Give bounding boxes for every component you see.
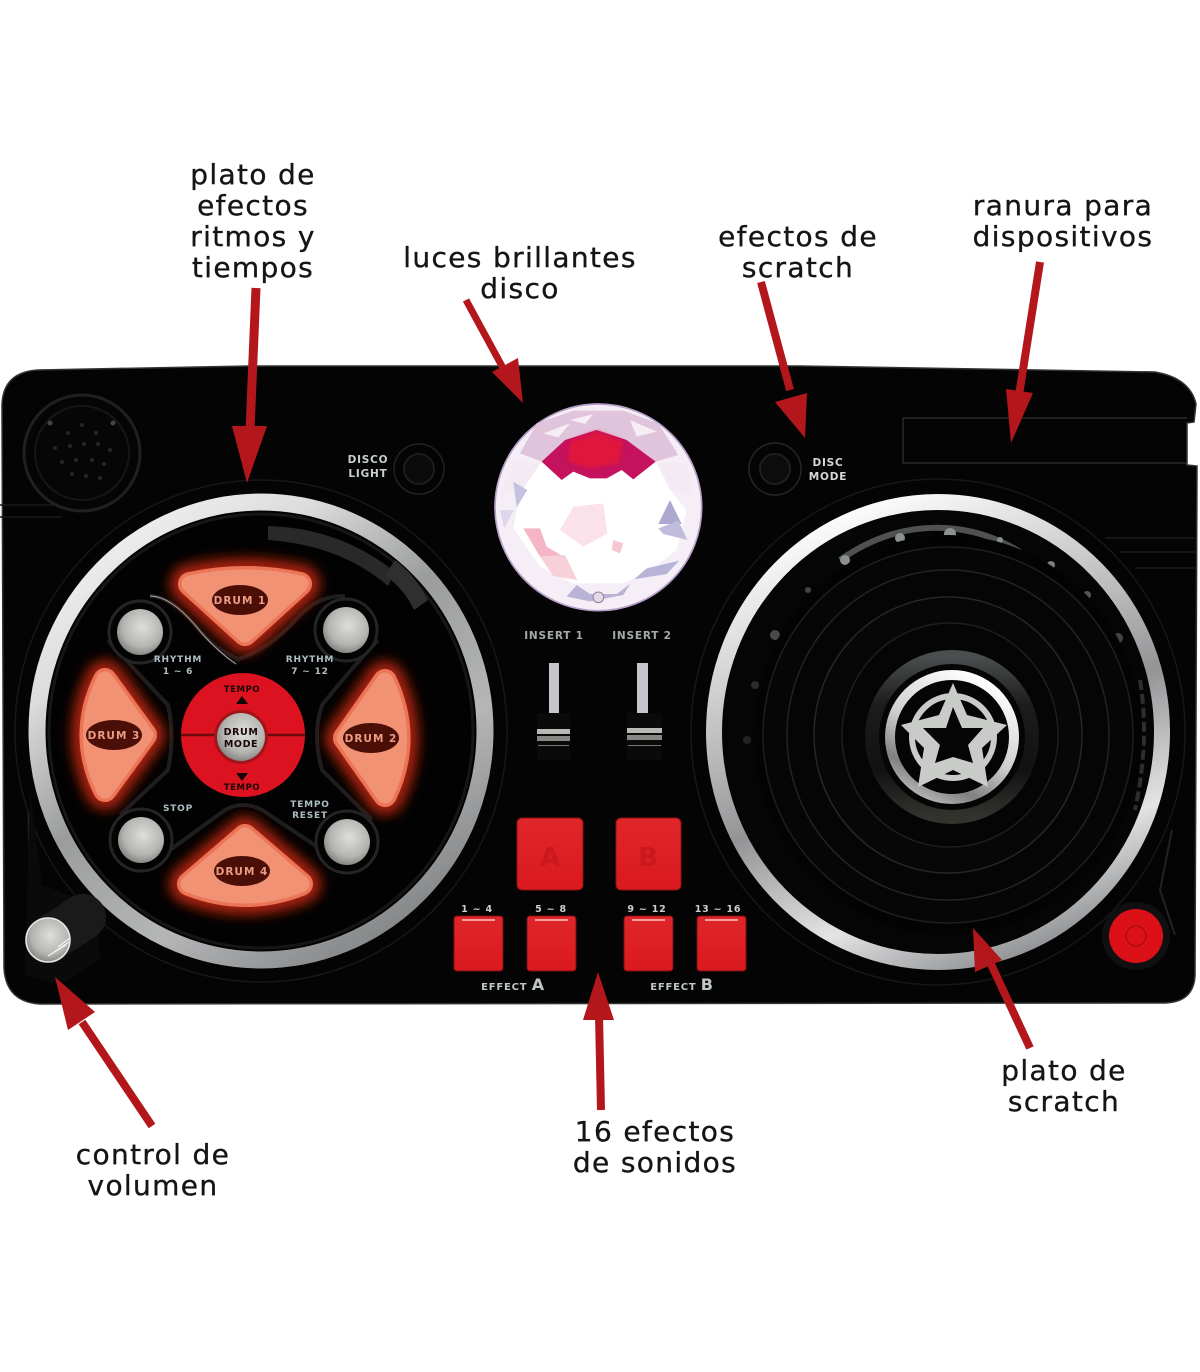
labels: rhythm and tempo: RESET [292,811,328,821]
effect buttons and labels: 9 ~ 12 [627,904,667,915]
caption: luces brillantes disco: luces brillantes [403,241,637,274]
arrow: to sound effects [583,972,614,1110]
caption: plato de scratch: plato de [1001,1054,1127,1087]
slider: insert 1 [537,663,570,760]
pad: drum 3 [86,680,145,790]
button: B: B [638,843,658,873]
silver buttons [109,599,378,873]
right platter [691,479,1185,985]
labels: rhythm and tempo: 7 ~ 12 [291,667,329,677]
hub [872,657,1032,817]
ball facets [500,411,693,603]
effect buttons and labels: EFFECT A [481,975,545,994]
speaker grille [24,395,140,511]
pad: drum 2 [343,681,399,795]
drum glow [92,578,398,895]
tempo control [181,673,305,797]
arrow: to device slot [1006,262,1040,443]
button: disc mode [749,443,801,495]
caption: plato de efectos ritmos y tiempos: efectos [197,189,309,222]
label: disc mode: MODE [809,471,847,483]
effect buttons and labels: 5 ~ 8 [535,904,567,915]
label: insert 1: INSERT 1 [524,630,584,642]
arrow: to disco ball [466,300,523,403]
star emblem [890,675,1014,799]
tempo control: DRUM [224,727,258,738]
caption: control de volumen: volumen [88,1169,218,1202]
tempo control: TEMPO [224,685,260,695]
device body [0,366,1197,1004]
pad: drum 2: DRUM 2 [345,733,397,745]
caption: control de volumen: control de [76,1138,230,1171]
effect buttons and labels [454,904,746,994]
button: B [616,818,681,890]
caption: 16 efectos de sonidos: de sonidos [573,1146,737,1179]
pad: drum 1 [190,578,300,634]
slider: insert 2 [627,663,662,760]
concentric grooves [754,535,1142,935]
caption: efectos de scratch: scratch [742,251,854,284]
label: insert 2: INSERT 2 [612,630,672,642]
label: disco light: DISCO [348,454,388,466]
red button [1102,902,1170,970]
caption: luces brillantes disco: disco [480,272,560,305]
effect buttons and labels: 13 ~ 16 [695,904,741,915]
labels: rhythm and tempo [154,655,334,821]
labels: rhythm and tempo: RHYTHM [154,655,202,665]
volume knob [25,790,100,985]
arrow: to drum platter [232,288,267,483]
caption: plato de efectos ritmos y tiempos: tiempos [192,251,314,284]
button: A: A [540,843,560,873]
control cross outline [108,596,378,850]
button: A [517,818,583,890]
caption: 16 efectos de sonidos: 16 efectos [575,1115,735,1148]
left platter [15,480,507,982]
button: disco light [394,444,444,494]
caption: plato de scratch: scratch [1008,1085,1120,1118]
label: disc mode: DISC [812,457,844,469]
caption: ranura para dispositivos: dispositivos [973,220,1153,253]
arrow: to scratch platter [973,928,1030,1048]
labels: rhythm and tempo: RHYTHM [286,655,334,665]
caption: efectos de scratch: efectos de [718,220,878,253]
caption: plato de efectos ritmos y tiempos: plato de [190,158,316,191]
tempo control: MODE [224,739,258,750]
arrow: to disc mode [761,282,807,438]
device slot [903,418,1187,463]
tempo control: TEMPO [224,783,260,793]
labels: rhythm and tempo: TEMPO [290,800,330,810]
pad: drum 3: DRUM 3 [88,730,140,742]
pad: drum 4: DRUM 4 [216,866,268,878]
labels: rhythm and tempo: STOP [163,804,193,814]
effect buttons and labels: 1 ~ 4 [461,904,493,915]
center disco ball [495,404,702,611]
caption: ranura para dispositivos: ranura para [973,189,1153,222]
arrow: to volume control [55,977,152,1126]
pad: drum 4 [189,836,301,895]
effect buttons and labels: EFFECT B [650,975,714,994]
studded inner ring [743,528,1144,810]
caption: plato de efectos ritmos y tiempos: ritmos y [190,220,316,253]
pad: drum 1: DRUM 1 [214,595,266,607]
label: disco light: LIGHT [348,468,388,480]
labels: rhythm and tempo: 1 ~ 6 [163,667,193,677]
